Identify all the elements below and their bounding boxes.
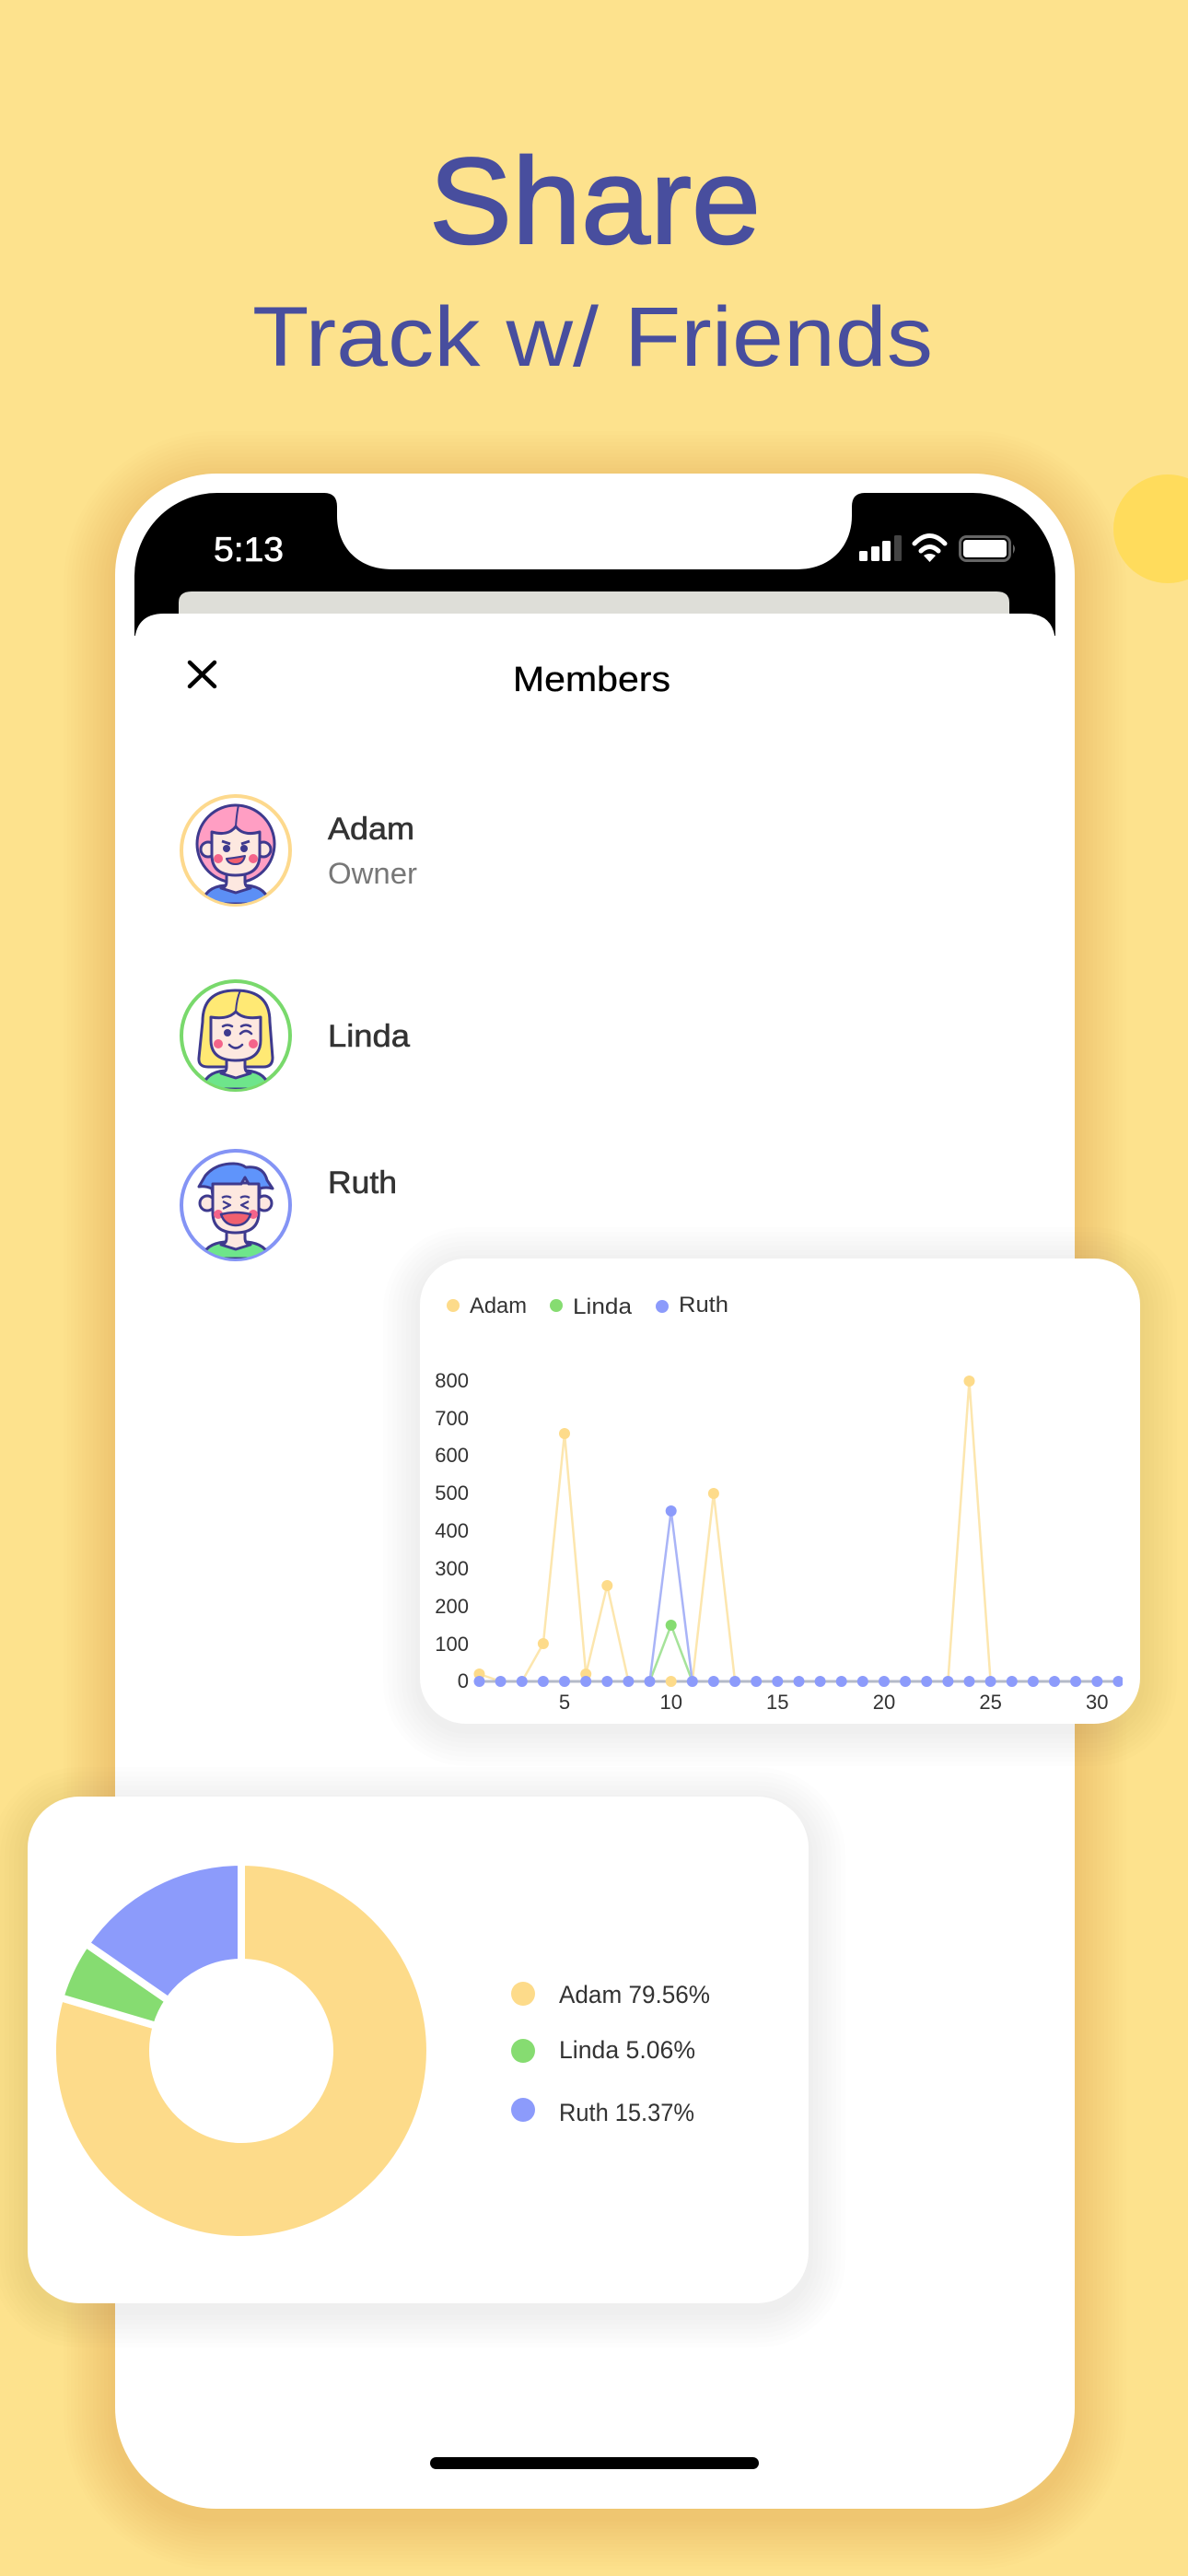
series line: Linda [652,1630,691,1677]
status time: 5:13 [214,531,284,568]
series points: Adam [473,1376,974,1687]
chart legend: Adam [470,1294,527,1318]
y axis labels: 300 [435,1557,469,1580]
panel: line chart [420,1259,1140,1724]
name: Ruth: Ruth [328,1165,397,1200]
x axis labels: 25 [979,1691,1002,1714]
x axis labels [559,1691,1109,1714]
x axis labels: 30 [1086,1691,1109,1714]
donut card shadow [0,1767,845,2348]
x axis labels: 10 [659,1691,682,1714]
avatar: Ruth [181,1151,290,1259]
card background [420,1259,1140,1724]
panel: donut chart [28,1797,809,2303]
sheet title: Members [513,661,670,699]
icon: battery [960,536,1015,560]
y axis labels: 200 [435,1595,469,1618]
card background [28,1797,809,2303]
donut legend [511,1981,710,2126]
members sheet [134,614,1055,663]
zero baseline [479,1680,1123,1682]
series points: Ruth [473,1505,1124,1687]
role: Owner: Owner [328,857,417,890]
y axis labels [435,1369,469,1692]
icon: wifi [914,536,945,562]
member: Ruth [181,1151,397,1259]
avatar: Adam [181,796,290,905]
donut chart [52,1862,430,2240]
line chart card shadow [383,1227,1177,1766]
y axis labels: 100 [435,1633,469,1656]
series line: Ruth [650,1511,693,1681]
name: Adam: Adam [328,812,414,847]
title [252,134,933,384]
home indicator [430,2457,759,2469]
series line: Adam [484,1386,991,1680]
x axis labels: 15 [766,1691,789,1714]
donut legend: Ruth 15.37% [559,2099,694,2126]
phone mockup [115,474,1075,2509]
y axis labels: 500 [435,1481,469,1505]
chart legend: Linda [573,1294,633,1319]
member: Linda [181,981,410,1090]
phone body [115,474,1075,2509]
heading: Share: Share [429,134,761,270]
x axis labels: 20 [873,1691,895,1714]
subheading: Track w/ Friends: Track w/ Friends [252,290,933,384]
donut legend: Adam 79.56% [559,1981,710,2008]
y axis labels: 0 [458,1669,469,1692]
series point: Linda [666,1620,677,1631]
y axis labels: 600 [435,1444,469,1467]
chart legend [447,1293,728,1319]
grey background card [179,591,1009,617]
y axis labels: 800 [435,1369,469,1392]
decorative yellow circle [1113,474,1188,583]
icon: close X [190,662,215,686]
avatar: Linda [181,981,290,1090]
member: Adam [181,796,417,905]
icon: signal bars [859,535,902,561]
y axis labels: 700 [435,1407,469,1430]
name: Linda: Linda [328,1019,410,1054]
donut legend: Linda 5.06% [559,2036,695,2064]
x axis labels: 5 [559,1691,570,1714]
chart legend: Ruth [679,1293,728,1317]
y axis labels: 400 [435,1519,469,1542]
black status bar area with notch [134,493,1055,636]
phone shadow [64,431,1126,2570]
plot: lines and points [473,1376,1124,1687]
